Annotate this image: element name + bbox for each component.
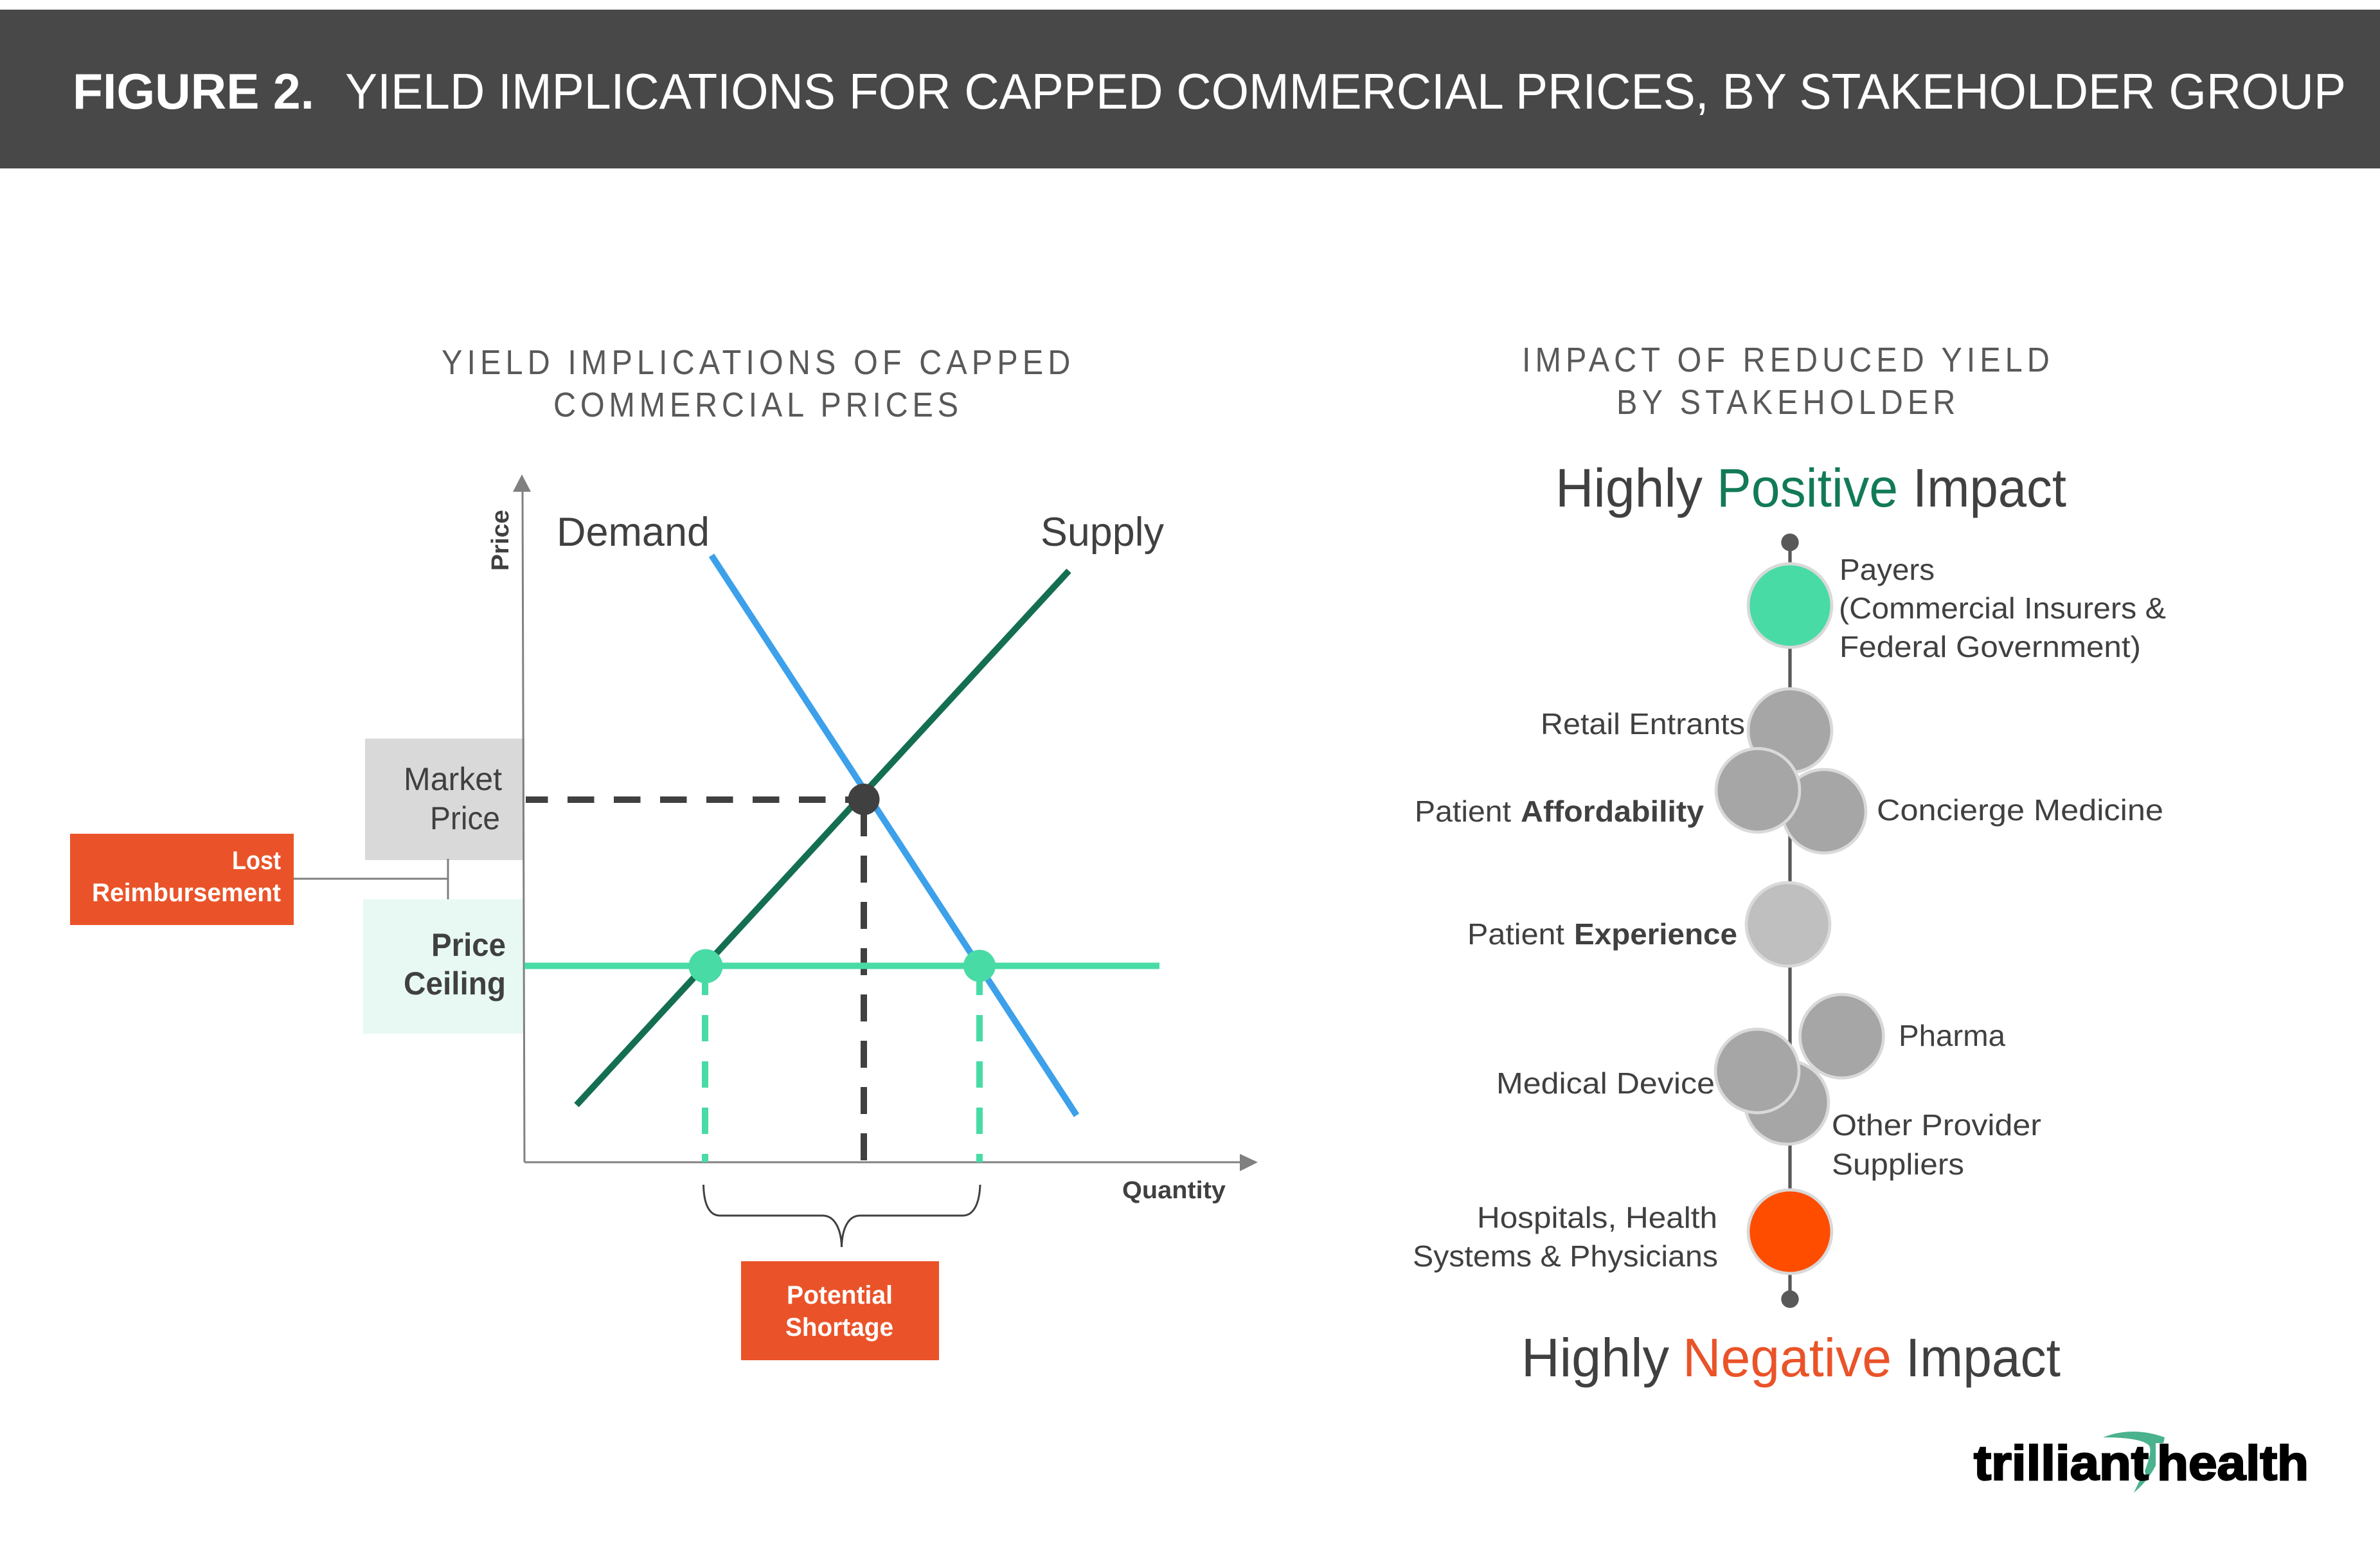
patient affordability label: Patient [1415,795,1511,828]
pharma label: Pharma [1899,1019,2005,1052]
concierge medicine label: Concierge Medicine [1877,793,2163,827]
highly negative impact heading [1521,1327,2061,1388]
x axis with arrow [524,1154,1258,1171]
demand line [711,555,1077,1115]
hospitals label: Hospitals, Health [1477,1201,1717,1234]
left panel heading: COMMERCIAL PRICES [553,385,958,424]
highly positive impact heading: Impact [1913,458,2066,518]
supply line [577,571,1069,1105]
logo: trilliant health: health [2157,1436,2309,1491]
price ceiling box: Ceiling [404,966,506,1002]
price ceiling line [524,963,1159,969]
payers label: (Commercial Insurers & [1839,591,2166,625]
market price box: Price [430,800,500,836]
patient affordability circle [1716,748,1800,832]
figure number: FIGURE 2. [73,63,314,120]
connector: lost reimbursement [294,859,448,899]
payers label [1839,553,2166,663]
header banner [0,10,2380,168]
concierge medicine circle [1782,769,1866,853]
other provider suppliers label: Suppliers [1832,1147,1964,1181]
y axis label: Price [487,510,514,571]
demand label: Demand [557,510,710,555]
other provider suppliers label: Other Provider [1832,1108,2041,1142]
payers circle [1748,564,1832,647]
market price box [365,739,524,860]
market price dashed guide [526,796,864,803]
potential shortage callout: Potential [787,1281,893,1309]
ceiling and supply intersection [689,949,722,984]
highly positive impact heading [1555,458,2066,518]
patient experience label [1467,917,1737,951]
patient experience label: Experience [1574,917,1737,951]
equilibrium quantity dashed guide [861,800,867,1160]
highly positive impact heading: Positive [1717,458,1898,518]
panel: supply and demand chart [70,343,1258,1360]
logo: trilliant health [1974,1432,2309,1493]
brace [703,1185,980,1247]
right panel heading: BY STAKEHOLDER [1616,382,1955,422]
x axis label: Quantity [1122,1177,1226,1204]
left panel heading: YIELD IMPLICATIONS OF CAPPED [442,343,1070,382]
highly negative impact heading: Highly [1521,1327,1669,1388]
hospitals label [1413,1201,1718,1273]
equilibrium point [848,784,879,815]
highly negative impact heading: Negative [1683,1327,1892,1388]
hospitals label: Systems & Physicians [1413,1239,1718,1273]
lost reimbursement callout [70,834,294,925]
right panel heading: IMPACT OF REDUCED YIELD [1522,340,2050,379]
retail entrants label: Retail Entrants [1541,707,1745,741]
left panel heading [442,343,1070,424]
retail entrants circle [1748,689,1832,773]
potential shortage callout: Shortage [785,1313,893,1342]
figure title: YIELD IMPLICATIONS FOR CAPPED COMMERCIAL PRICES, BY STAKEHOLDER GROUP [345,63,2346,120]
market price box: Market [404,761,502,797]
lost reimbursement callout: Lost [232,847,281,875]
patient experience circle [1746,883,1830,966]
medical device label: Medical Device [1496,1066,1715,1100]
highly negative impact heading: Impact [1906,1327,2061,1388]
other provider suppliers label [1832,1108,2041,1181]
supply label: Supply [1041,510,1164,555]
right panel heading [1522,340,2050,422]
hospitals circle [1748,1190,1832,1273]
patient affordability label [1415,795,1704,828]
ceiling and demand intersection [963,950,996,982]
vertical scale line [1781,534,1799,1308]
price ceiling box: Price [431,927,506,963]
lost reimbursement callout: Reimbursement [92,879,281,907]
pharma circle [1800,994,1883,1078]
price ceiling box [363,899,524,1034]
highly positive impact heading: Highly [1555,458,1703,518]
panel: stakeholder impact scale [1413,340,2166,1388]
payers label: Payers [1839,553,1935,586]
potential shortage callout [741,1261,939,1360]
y axis with arrow [513,474,531,1162]
patient experience label: Patient [1467,917,1564,951]
shortage dashed guides [705,967,980,1162]
payers label: Federal Government) [1839,630,2141,663]
medical device circle [1715,1029,1799,1113]
other provider suppliers circle [1745,1061,1829,1144]
patient affordability label: Affordability [1521,795,1704,828]
logo: trilliant health: trilliant [1974,1436,2149,1491]
